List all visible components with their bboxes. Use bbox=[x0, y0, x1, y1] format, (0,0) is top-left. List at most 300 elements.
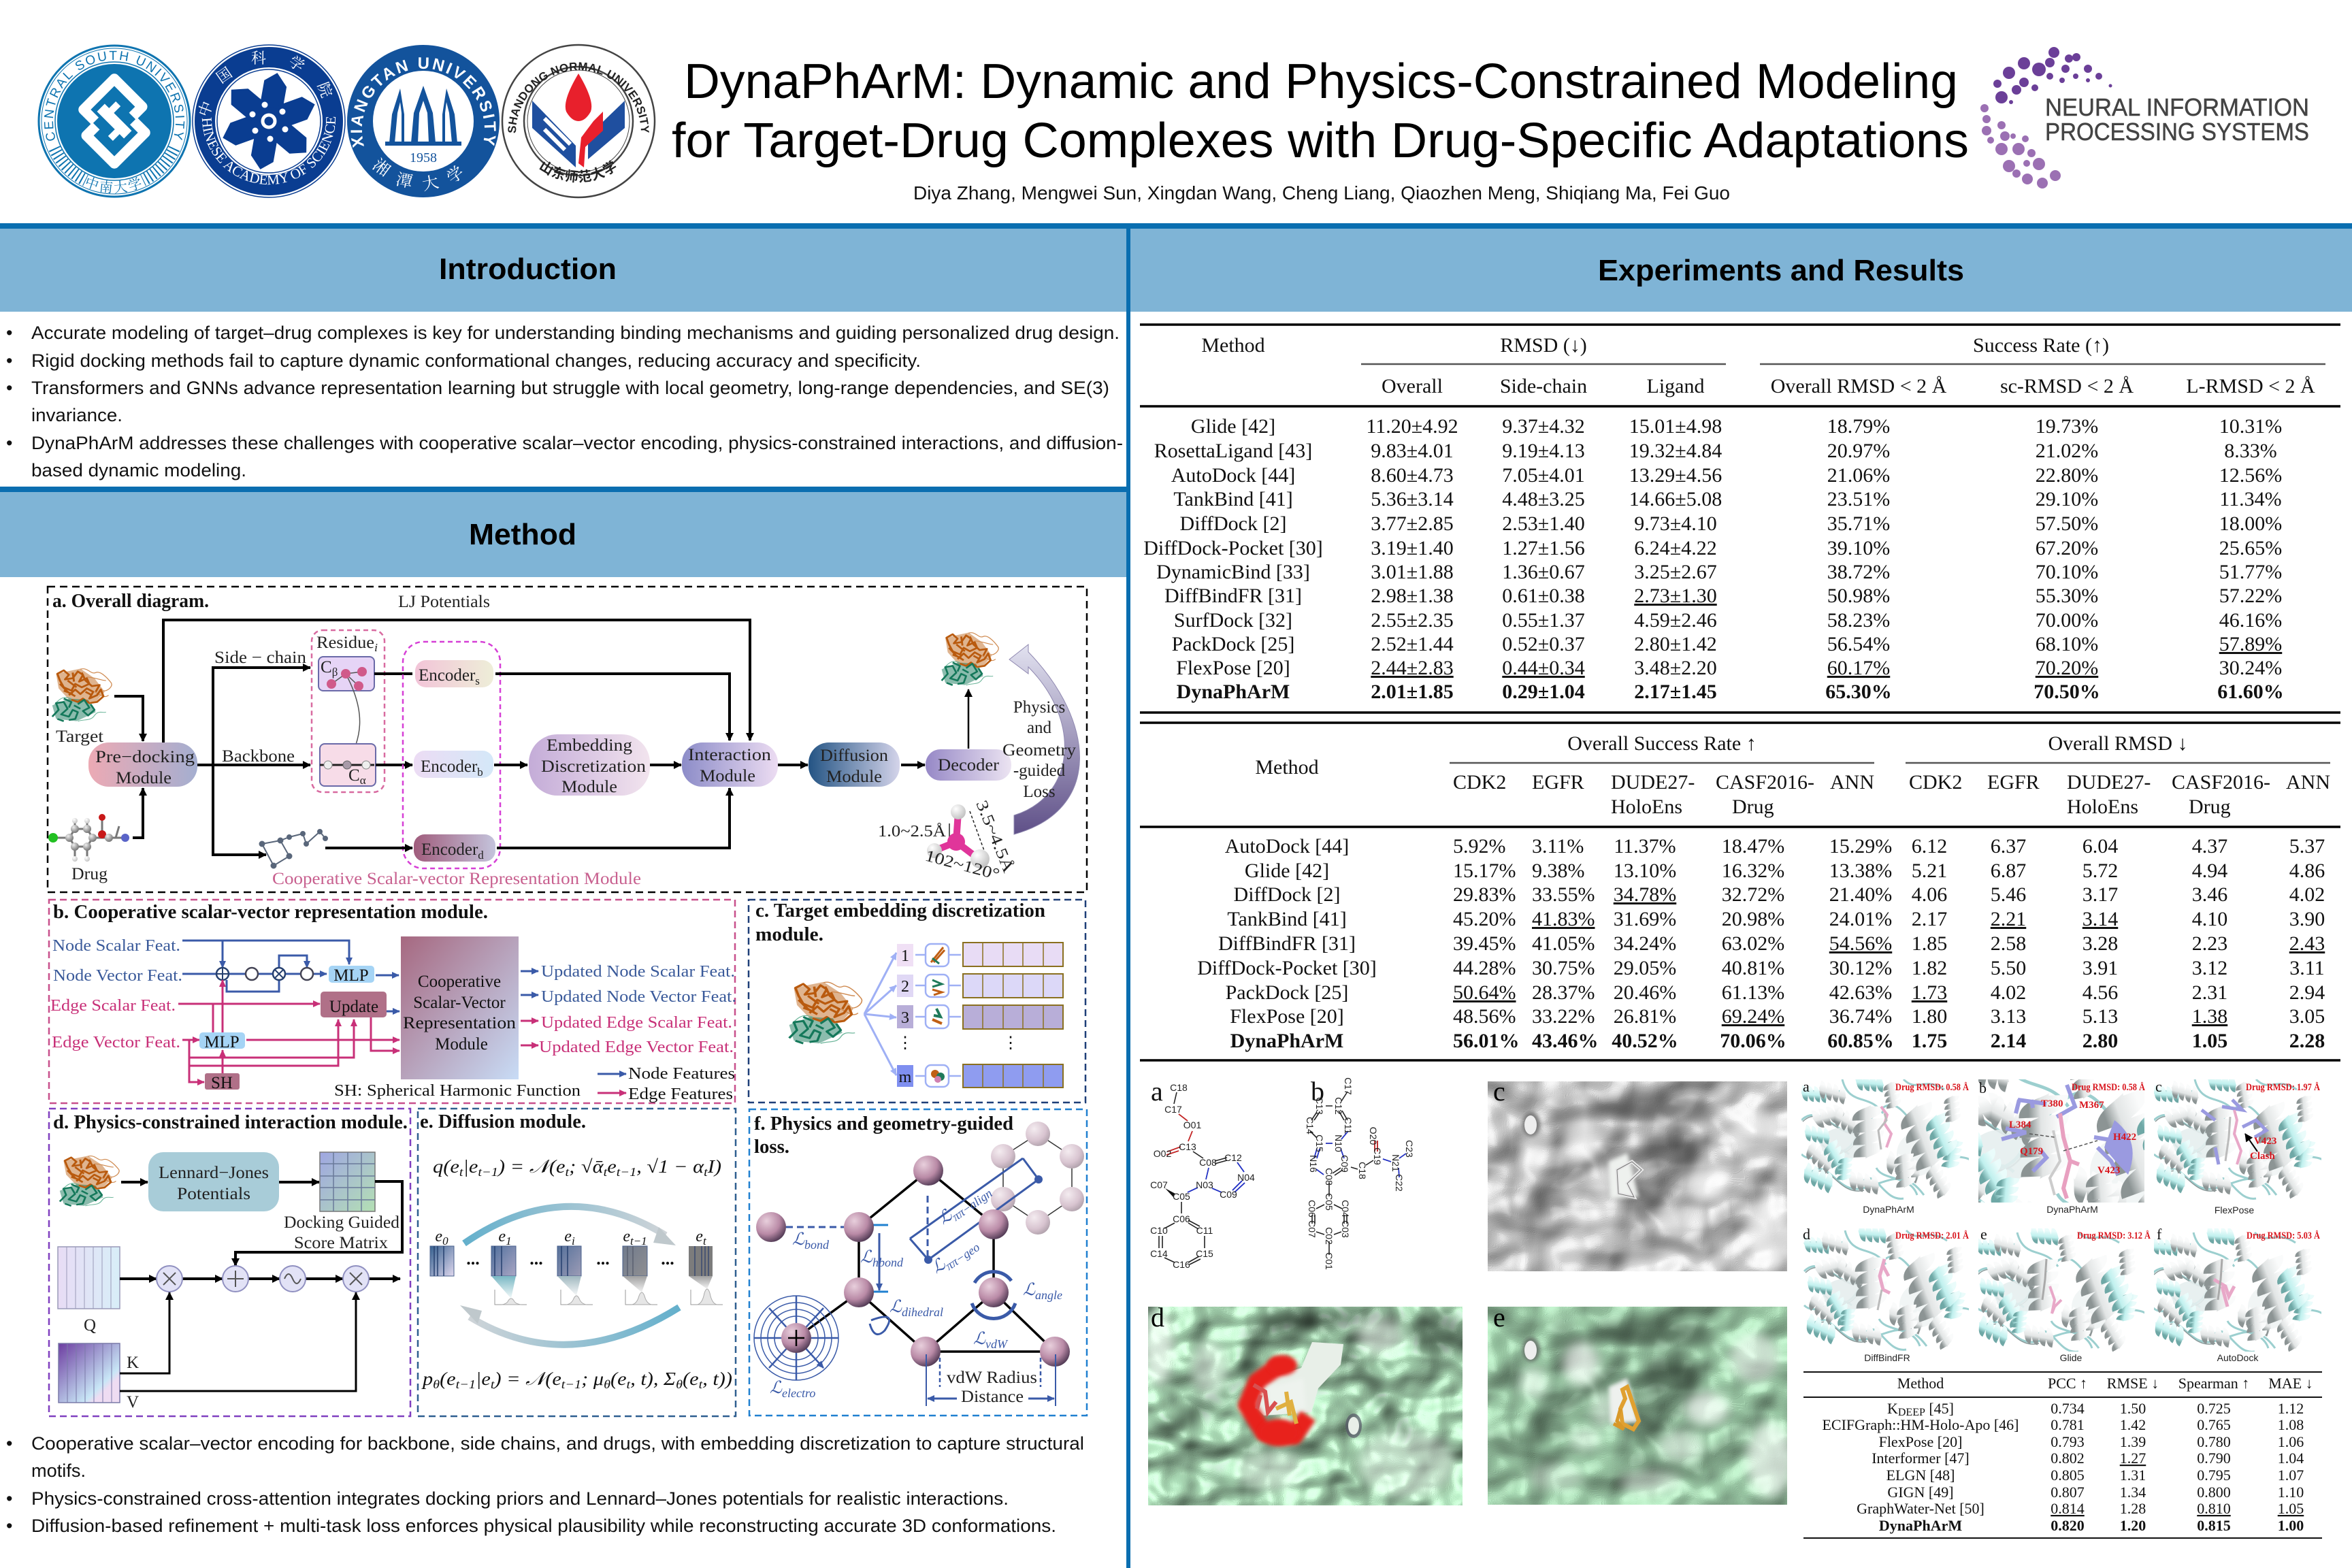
figure a: 2D molecule bbox=[1150, 1076, 1255, 1270]
row: DynaPhArM: 65.30% bbox=[1825, 681, 1892, 703]
row: DiffBindFR: 2.58 bbox=[1991, 932, 2026, 955]
edge feature flow bbox=[178, 980, 399, 1082]
table 2 header: Drug bbox=[2189, 796, 2231, 818]
table 2 header: Overall Success Rate ↑ bbox=[1567, 732, 1757, 755]
panel c: target embedding discretization bbox=[749, 900, 1085, 1102]
row: PackDock: 0.52±0.37 bbox=[1502, 633, 1585, 655]
row: DiffDock-Pocket: 67.20% bbox=[2036, 537, 2098, 559]
protein view b: DynaPhArM closeup: L384 bbox=[2009, 1120, 2031, 1130]
table 2 header: CASF2016- bbox=[1716, 771, 1814, 794]
figure a: 2D molecule: C08 bbox=[1199, 1157, 1217, 1168]
equation: reverse: |e bbox=[476, 1369, 491, 1389]
row: TankBind: 5.36±3.14 bbox=[1371, 488, 1454, 510]
figure b: 2D molecule: C03 bbox=[1340, 1220, 1351, 1238]
table 1 header: RMSD (↓) bbox=[1500, 334, 1587, 357]
table 1 header: Ligand bbox=[1647, 375, 1704, 397]
row: FlexPose: 1.38 bbox=[2192, 1005, 2227, 1028]
row: DynamicBind: 1.36±0.67 bbox=[1502, 561, 1585, 583]
figure b: 2D molecule: C06 bbox=[1307, 1200, 1318, 1218]
logo: Chinese Academy of Sciences: CHINESE ACADEMY OF SCIENCES bbox=[201, 117, 336, 185]
row: FlexPose: FlexPose [20] bbox=[1230, 1005, 1344, 1028]
logo: Xiangtan University: 1958 bbox=[410, 150, 437, 165]
protein view b: DynaPhArM closeup: Drug RMSD: 0.58 Å bbox=[2072, 1082, 2145, 1093]
row: SurfDock: 0.55±1.37 bbox=[1502, 609, 1585, 632]
equation: reverse: θ bbox=[604, 1377, 610, 1391]
row: FlexPose: 33.22% bbox=[1532, 1005, 1595, 1028]
arrow: embedding to interaction bbox=[650, 764, 681, 766]
row: KDEEP: 1.50 bbox=[2120, 1400, 2146, 1417]
figure a: 2D molecule: C07 bbox=[1150, 1179, 1168, 1190]
table 2 header: Drug bbox=[1732, 796, 1774, 818]
arc: forward process bbox=[464, 1207, 676, 1245]
row: PackDock: 2.94 bbox=[2289, 981, 2325, 1004]
row: TankBind: 31.69% bbox=[1614, 908, 1676, 930]
row: GraphWater-Net: 0.810 bbox=[2197, 1500, 2231, 1517]
ellipsis between tiles: ... bbox=[466, 1249, 480, 1269]
loss labels: ℒ bbox=[935, 1206, 956, 1228]
equation: reverse: ; μ bbox=[581, 1369, 604, 1389]
row: PackDock: 2.80±1.42 bbox=[1634, 633, 1717, 655]
table 2: cross-dataset performance bbox=[1140, 723, 2340, 1060]
row: DynaPhArM: 1.75 bbox=[1912, 1030, 1947, 1052]
text block: introduction bullets: • bbox=[6, 433, 12, 453]
title: DynaPhArM: Dynamic and Physics-Constrained Modeling bbox=[684, 54, 1958, 109]
equation: forward: |e bbox=[463, 1156, 478, 1177]
row: AutoDock: 11.37% bbox=[1614, 835, 1676, 858]
table 2 header: CDK2 bbox=[1909, 771, 1962, 794]
row: KDEEP: 0.725 bbox=[2197, 1400, 2231, 1417]
equation: reverse: (e bbox=[610, 1369, 627, 1389]
figure b: 2D molecule: C12 bbox=[1333, 1097, 1344, 1115]
row: DynaPhArM: 2.28 bbox=[2289, 1030, 2325, 1052]
label: physics and geometry guided loss: -guided bbox=[1013, 762, 1066, 780]
protein view c: FlexPose bbox=[2113, 1039, 2352, 1256]
row: DiffBindFR: 41.05% bbox=[1532, 932, 1595, 955]
row: DiffDock: 9.73±4.10 bbox=[1634, 512, 1717, 535]
outputs: Updated Node Scalar Feat. bbox=[541, 963, 735, 981]
row: AutoDock: 3.11% bbox=[1532, 835, 1584, 858]
row: PackDock: 28.37% bbox=[1532, 981, 1595, 1004]
row: DiffDock: 57.50% bbox=[2036, 512, 2098, 535]
arrow: diffusion to decoder bbox=[901, 764, 925, 766]
protein view d: DiffBindFR: DiffBindFR bbox=[1864, 1352, 1910, 1363]
row: FlexPose: 3.13 bbox=[1991, 1005, 2026, 1028]
row: Glide: Glide [42] bbox=[1245, 860, 1329, 882]
row: DynamicBind: 70.10% bbox=[2036, 561, 2098, 583]
row: TankBind: 2.17 bbox=[1912, 908, 1947, 930]
arrows to encoders bbox=[374, 674, 412, 765]
row: DynamicBind bbox=[1156, 561, 2282, 583]
row: DynaPhArM: DynaPhArM bbox=[1879, 1517, 1962, 1534]
protein view a: DynaPhArM: Drug RMSD: 0.58 Å bbox=[1895, 1082, 1969, 1093]
logo: Xiangtan University: XIANGTAN UNIVERSITY bbox=[350, 57, 496, 148]
label: physics and geometry guided loss: Geometry bbox=[1002, 741, 1077, 760]
input labels: Node Scalar Feat. bbox=[52, 937, 180, 955]
figure b: 2D molecule: C05 bbox=[1324, 1193, 1335, 1211]
protein view d: DiffBindFR: Drug RMSD: 2.01 Å bbox=[1895, 1230, 1969, 1241]
figure a: 2D molecule: C11 bbox=[1196, 1225, 1213, 1236]
row: DynaPhArM: 0.29±1.04 bbox=[1502, 681, 1585, 703]
row: DynamicBind: DynamicBind [33] bbox=[1156, 561, 1310, 583]
logo: Central South University bbox=[38, 45, 191, 197]
row: DynaPhArM: 61.60% bbox=[2217, 681, 2284, 703]
figure a: 2D molecule: C05 bbox=[1173, 1191, 1190, 1202]
protein view e: Glide: Drug RMSD: 3.12 Å bbox=[2077, 1230, 2151, 1241]
box: SH: SH bbox=[211, 1074, 233, 1092]
row: TankBind bbox=[1227, 908, 2325, 930]
row: RosettaLigand: 9.83±4.01 bbox=[1371, 440, 1454, 462]
row: PackDock: 4.56 bbox=[2082, 981, 2118, 1004]
table 2 header: CASF2016- bbox=[2172, 771, 2270, 794]
row: DiffDock: 5.46 bbox=[1991, 883, 2026, 906]
row: DynamicBind: 3.01±1.88 bbox=[1371, 561, 1454, 583]
text block: introduction bullets: Accurate modeling of target–drug complexes is key for understanding binding mechanisms and guiding personalized drug design. bbox=[31, 323, 1120, 343]
row: DynaPhArM: 2.80 bbox=[2082, 1030, 2118, 1052]
row: DiffDock: DiffDock [2] bbox=[1234, 883, 1340, 906]
gaussian glyphs bbox=[491, 1276, 723, 1305]
row: Interformer: 0.790 bbox=[2197, 1450, 2231, 1467]
fan arrows bbox=[864, 953, 896, 1075]
logo: Shandong Normal University: 山东师范大学 bbox=[539, 160, 617, 183]
timestep labels: e bbox=[435, 1228, 442, 1245]
figure d: green surface with pocket: d bbox=[1151, 1302, 1164, 1333]
row: FlexPose: 3.05 bbox=[2289, 1005, 2325, 1028]
row: DiffDock: 3.77±2.85 bbox=[1371, 512, 1454, 535]
timestep labels: e bbox=[696, 1228, 703, 1245]
row: DiffBindFR: DiffBindFR [31] bbox=[1164, 585, 1302, 607]
row: ELGN: 1.31 bbox=[2120, 1467, 2146, 1484]
row m: m bbox=[899, 1068, 912, 1086]
outputs: Updated Edge Scalar Feat. bbox=[541, 1014, 732, 1032]
figure a: 2D molecule: C13 bbox=[1179, 1141, 1196, 1152]
vdW radius and distance bbox=[926, 1354, 1056, 1406]
row: FlexPose bbox=[1230, 1005, 2325, 1028]
arrow: encoder d to interaction bbox=[497, 788, 730, 848]
row: KDEEP: DEEP bbox=[1898, 1407, 1925, 1418]
row: GraphWater-Net: GraphWater-Net [50] bbox=[1857, 1500, 1984, 1517]
row: TankBind: 4.10 bbox=[2192, 908, 2227, 930]
row: DynamicBind: 3.25±2.67 bbox=[1634, 561, 1717, 583]
table 2 header: CDK2 bbox=[1453, 771, 1506, 794]
row: GraphWater-Net bbox=[1857, 1500, 2304, 1517]
figure a: 2D molecule: O01 bbox=[1183, 1120, 1201, 1130]
row: FlexPose: 30.24% bbox=[2219, 657, 2282, 679]
label: target: Target bbox=[56, 728, 103, 746]
box: update bbox=[321, 992, 387, 1017]
table 2 header: DUDE27- bbox=[1611, 771, 1695, 794]
figure b: 2D molecule: C22 bbox=[1394, 1174, 1405, 1192]
figure b: 2D molecule: C04 bbox=[1340, 1200, 1351, 1218]
row: DiffDock: 35.71% bbox=[1827, 512, 1890, 535]
panel a title: a. Overall diagram. bbox=[52, 591, 209, 612]
table 2 header: EGFR bbox=[1532, 771, 1584, 794]
row: DiffDock-Pocket: 44.28% bbox=[1453, 957, 1516, 979]
row: FlexPose: 48.56% bbox=[1453, 1005, 1516, 1028]
row: DiffDock-Pocket: 5.50 bbox=[1991, 957, 2026, 979]
arrow: decoder output bbox=[968, 689, 969, 749]
figure b: 2D molecule: O20 bbox=[1368, 1127, 1379, 1145]
figure a: 2D molecule: C06 bbox=[1173, 1213, 1190, 1224]
ghost ring bbox=[991, 1122, 1084, 1235]
row: DynaPhArM: DynaPhArM bbox=[1177, 681, 1290, 703]
loss labels bbox=[770, 1180, 1062, 1400]
row: DiffDock-Pocket: 30.75% bbox=[1532, 957, 1595, 979]
figure b: 2D molecule: C02 bbox=[1324, 1227, 1335, 1245]
loss labels: bond bbox=[804, 1238, 830, 1252]
label: physics and geometry guided loss bbox=[1002, 698, 1077, 801]
box: pre-docking module: Module bbox=[116, 769, 172, 787]
figure e: green surface with ligand bbox=[1480, 1298, 1795, 1513]
row: AutoDock: 6.37 bbox=[1991, 835, 2026, 858]
row: Interformer: 0.802 bbox=[2051, 1450, 2085, 1467]
row: DynaPhArM bbox=[1177, 681, 2284, 703]
header band: blue rule bbox=[0, 223, 2352, 229]
row: DiffDock: 3.46 bbox=[2192, 883, 2227, 906]
row: Glide: 13.10% bbox=[1614, 860, 1676, 882]
figure a: 2D molecule: C09 bbox=[1220, 1189, 1237, 1200]
row: SurfDock: 70.00% bbox=[2036, 609, 2098, 632]
row: PackDock: 50.64% bbox=[1453, 981, 1516, 1004]
row: SurfDock: 46.16% bbox=[2219, 609, 2282, 632]
ellipsis bbox=[897, 1034, 1019, 1052]
timestep labels bbox=[435, 1228, 707, 1247]
row: AutoDock: 6.04 bbox=[2082, 835, 2118, 858]
text block: introduction bullets: based dynamic modeling. bbox=[31, 460, 246, 480]
row: ELGN bbox=[1886, 1467, 2304, 1484]
box: encoder b bbox=[414, 751, 493, 779]
row: DynaPhArM: DynaPhArM bbox=[1230, 1030, 1343, 1052]
table 3 header: MAE ↓ bbox=[2268, 1375, 2313, 1392]
text block: method bullets: Cooperative scalar–vector encoding for backbone, side chains, and drugs, with embedding discretization to capture structural bbox=[31, 1433, 1084, 1454]
row: Glide: 5.72 bbox=[2082, 860, 2118, 882]
logo: Xiangtan University: 湘潭大学 bbox=[372, 157, 463, 192]
figure b: 2D molecule: N10 bbox=[1333, 1134, 1344, 1152]
row: Glide: 5.21 bbox=[1912, 860, 1947, 882]
atoms bbox=[756, 1156, 1070, 1367]
timestep labels: e bbox=[498, 1228, 506, 1245]
row: DynaPhArM: 56.01% bbox=[1453, 1030, 1519, 1052]
row: DiffDock-Pocket: 3.12 bbox=[2192, 957, 2227, 979]
arrow bbox=[121, 1181, 148, 1183]
logo: Chinese Academy of Sciences bbox=[192, 44, 346, 198]
icon: hydrogen bond geometry bbox=[878, 798, 1017, 884]
row: SurfDock: 2.55±2.35 bbox=[1371, 609, 1454, 632]
arrow: encoder b to embedding bbox=[494, 764, 527, 766]
loss labels: ℒ bbox=[860, 1248, 872, 1267]
box: encoder s: Encoder bbox=[419, 666, 475, 685]
row: DynaPhArM: 60.85% bbox=[1827, 1030, 1894, 1052]
residue box: β bbox=[332, 666, 338, 679]
panel d title: d. Physics-constrained interaction module. bbox=[53, 1112, 408, 1133]
row 2: 2 bbox=[901, 978, 909, 996]
box: SH bbox=[205, 1073, 240, 1092]
docking guided score matrix bbox=[284, 1152, 400, 1252]
box: cooperative module: Module bbox=[435, 1035, 488, 1054]
row 1: 1 bbox=[901, 947, 909, 965]
section heading: Experiments and Results: Experiments and Results bbox=[1598, 254, 1964, 287]
protein view a: DynaPhArM: a bbox=[1803, 1078, 1810, 1095]
row: AutoDock bbox=[1171, 464, 2282, 487]
row: AutoDock: 21.06% bbox=[1827, 464, 1890, 487]
row: DynaPhArM: 2.14 bbox=[1991, 1030, 2026, 1052]
row: TankBind: 3.90 bbox=[2289, 908, 2325, 930]
loss labels: hbond bbox=[872, 1256, 904, 1269]
equation: reverse: θ bbox=[433, 1377, 440, 1391]
arrow: side-chain bbox=[213, 668, 310, 765]
loss labels: ℒ bbox=[973, 1330, 985, 1348]
figure b: 2D molecule: C14 bbox=[1305, 1117, 1316, 1134]
icon: hydrogen bond geometry: 3.5~4.5Å bbox=[972, 798, 1017, 876]
noise tiles bbox=[430, 1246, 713, 1276]
box: embedding discretization: Module bbox=[561, 778, 617, 796]
row: PackDock: 56.54% bbox=[1827, 633, 1890, 655]
figure a: 2D molecule: O02 bbox=[1154, 1148, 1171, 1159]
icon: output protein bbox=[942, 632, 998, 685]
bond loss markers bbox=[786, 1158, 1043, 1292]
text block: method bullets: Diffusion-based refinement + multi-task loss enforces physical plausibility while reconstructing accurate 3D conformations. bbox=[31, 1516, 1056, 1536]
row: DiffDock: 4.06 bbox=[1912, 883, 1947, 906]
box: embedding discretization bbox=[529, 734, 650, 796]
box: encoder d: Encoder bbox=[421, 840, 478, 859]
row: PackDock: 1.73 bbox=[1912, 981, 1947, 1004]
text block: method bullets bbox=[6, 1433, 1084, 1536]
icon: hydrogen bond geometry: 1.0~2.5Å bbox=[878, 823, 947, 840]
row: ECIFGraph: 1.42 bbox=[2120, 1416, 2146, 1433]
loss labels: ℒ bbox=[792, 1230, 804, 1249]
row: GIGN: 0.800 bbox=[2197, 1484, 2231, 1501]
row: RosettaLigand: RosettaLigand [43] bbox=[1154, 440, 1312, 462]
row: AutoDock: 4.37 bbox=[2192, 835, 2227, 858]
text block: introduction bullets: invariance. bbox=[31, 405, 122, 425]
block Q: Q bbox=[84, 1316, 96, 1335]
equation: reverse: (e bbox=[683, 1369, 699, 1389]
equation: reverse: t bbox=[699, 1377, 703, 1391]
box: interaction module: Interaction bbox=[688, 746, 772, 764]
row: FlexPose bbox=[1176, 657, 2282, 679]
row: FlexPose: 1.80 bbox=[1912, 1005, 1947, 1028]
row: TankBind: 3.14 bbox=[2082, 908, 2118, 930]
label: physics and geometry guided loss: and bbox=[1027, 719, 1052, 737]
node feature flow bbox=[182, 941, 349, 992]
logo: Central South University: 中南大学 bbox=[86, 177, 142, 193]
flow arrows bbox=[120, 1279, 400, 1391]
equation: reverse: , t), Σ bbox=[630, 1369, 676, 1389]
figure b: 2D molecule: N21 bbox=[1390, 1154, 1401, 1172]
table 2 header: HoloEns bbox=[2067, 796, 2138, 818]
icon: protein bbox=[60, 1156, 119, 1206]
ellipsis between tiles: ... bbox=[596, 1249, 610, 1269]
row: DynaPhArM: 0.815 bbox=[2197, 1517, 2231, 1534]
row: PackDock bbox=[1172, 633, 2282, 655]
panel b title: b. Cooperative scalar-vector representation module. bbox=[53, 902, 488, 923]
row: TankBind: 11.34% bbox=[2219, 488, 2282, 510]
table 3: binding affinity bbox=[1803, 1372, 2322, 1538]
residue box: C bbox=[348, 766, 360, 785]
row: FlexPose: 69.24% bbox=[1722, 1005, 1784, 1028]
row: SurfDock: SurfDock [32] bbox=[1174, 609, 1292, 632]
block K V: V bbox=[127, 1393, 139, 1411]
row: FlexPose: 36.74% bbox=[1829, 1005, 1892, 1028]
row: DiffBindFR: 2.23 bbox=[2192, 932, 2227, 955]
dashed encoder group bbox=[403, 642, 500, 868]
ellipsis between tiles: ... bbox=[661, 1249, 674, 1269]
equation: forward: t bbox=[566, 1165, 570, 1179]
arrow: update to module bbox=[387, 1010, 399, 1013]
text block: introduction bullets: Rigid docking methods fail to capture dynamic conformational changes, reducing accuracy and specificity. bbox=[31, 350, 921, 371]
row: RosettaLigand: 20.97% bbox=[1827, 440, 1890, 462]
row: DynaPhArM bbox=[1230, 1030, 2325, 1052]
row: Glide: 19.73% bbox=[2036, 415, 2098, 438]
box: Lennard-Jones potentials: Potentials bbox=[177, 1185, 250, 1203]
row: DiffDock-Pocket bbox=[1143, 537, 2282, 559]
row: FlexPose: 2.44±2.83 bbox=[1371, 657, 1454, 679]
icon: drug molecule bbox=[48, 814, 129, 862]
row: Glide: 18.79% bbox=[1827, 415, 1890, 438]
loss labels: ππ−align bbox=[949, 1186, 995, 1224]
ellipsis between tiles: ... bbox=[529, 1249, 543, 1269]
table 1 header: sc-RMSD < 2 Å bbox=[2000, 375, 2134, 397]
block K V: K bbox=[127, 1354, 139, 1372]
figure a: 2D molecule: C16 bbox=[1173, 1259, 1190, 1270]
equation: forward: t bbox=[459, 1165, 464, 1179]
row: DynaPhArM: 40.52% bbox=[1612, 1030, 1678, 1052]
figure b: 2D molecule: C09 bbox=[1339, 1155, 1350, 1173]
row: FlexPose: 1.39 bbox=[2120, 1433, 2146, 1450]
equation: reverse: (e bbox=[440, 1369, 456, 1389]
row: FlexPose: FlexPose [20] bbox=[1879, 1433, 1962, 1450]
table 1 header: Success Rate (↑) bbox=[1973, 334, 2109, 357]
row: Glide: Glide [42] bbox=[1191, 415, 1275, 438]
box: MLP node: MLP bbox=[333, 966, 369, 985]
timestep labels: i bbox=[572, 1235, 575, 1247]
panel f title: f. Physics and geometry-guided bbox=[754, 1113, 1013, 1134]
row: DynaPhArM: 1.05 bbox=[2192, 1030, 2227, 1052]
timestep labels: 1 bbox=[506, 1235, 512, 1247]
row: SurfDock: 4.59±2.46 bbox=[1634, 609, 1717, 632]
row: DiffDock-Pocket: DiffDock-Pocket [30] bbox=[1197, 957, 1377, 979]
table 3 header: Method bbox=[1897, 1375, 1944, 1392]
figure a: 2D molecule: C17 bbox=[1164, 1104, 1182, 1115]
row: FlexPose: 0.44±0.34 bbox=[1502, 657, 1585, 679]
row: DiffDock-Pocket bbox=[1197, 957, 2325, 979]
row: Glide: 10.31% bbox=[2219, 415, 2282, 438]
row: AutoDock: 5.37 bbox=[2289, 835, 2325, 858]
equation: reverse: ) = 𝒩(e bbox=[493, 1369, 561, 1389]
row: DiffBindFR: 2.98±1.38 bbox=[1371, 585, 1454, 607]
text block: method bullets: Physics-constrained cross-attention integrates docking priors and Lennard–Jones potentials for realistic interactions. bbox=[31, 1488, 1009, 1509]
row: DiffBindFR: 39.45% bbox=[1453, 932, 1516, 955]
table 2 header: Overall RMSD ↓ bbox=[2048, 732, 2187, 755]
logo: Shandong Normal University bbox=[501, 44, 656, 199]
row: DiffBindFR: 2.43 bbox=[2289, 932, 2325, 955]
legend: Edge Features bbox=[628, 1085, 733, 1103]
row: ECIFGraph: ECIFGraph::HM-Holo-Apo [46] bbox=[1822, 1416, 2019, 1433]
row: FlexPose: 0.793 bbox=[2051, 1433, 2085, 1450]
figure b: 2D molecule: N16 bbox=[1308, 1155, 1319, 1173]
row: DiffBindFR bbox=[1218, 932, 2325, 955]
figure b: 2D molecule: C18 bbox=[1357, 1162, 1368, 1179]
row m bbox=[897, 1064, 1063, 1088]
row: GraphWater-Net: 1.05 bbox=[2278, 1500, 2304, 1517]
row: GIGN bbox=[1887, 1484, 2304, 1501]
loss labels: vdW bbox=[985, 1337, 1009, 1351]
equation: reverse: t−1 bbox=[456, 1377, 476, 1391]
figure a: 2D molecule: a bbox=[1151, 1076, 1163, 1107]
logo: Shandong Normal University: SHANDONG NORMAL UNIVERSITY bbox=[508, 62, 649, 133]
row: DiffDock: 32.72% bbox=[1722, 883, 1784, 906]
panel c title: c. Target embedding discretization bbox=[755, 900, 1045, 921]
row: DiffDock-Pocket: 30.12% bbox=[1829, 957, 1892, 979]
